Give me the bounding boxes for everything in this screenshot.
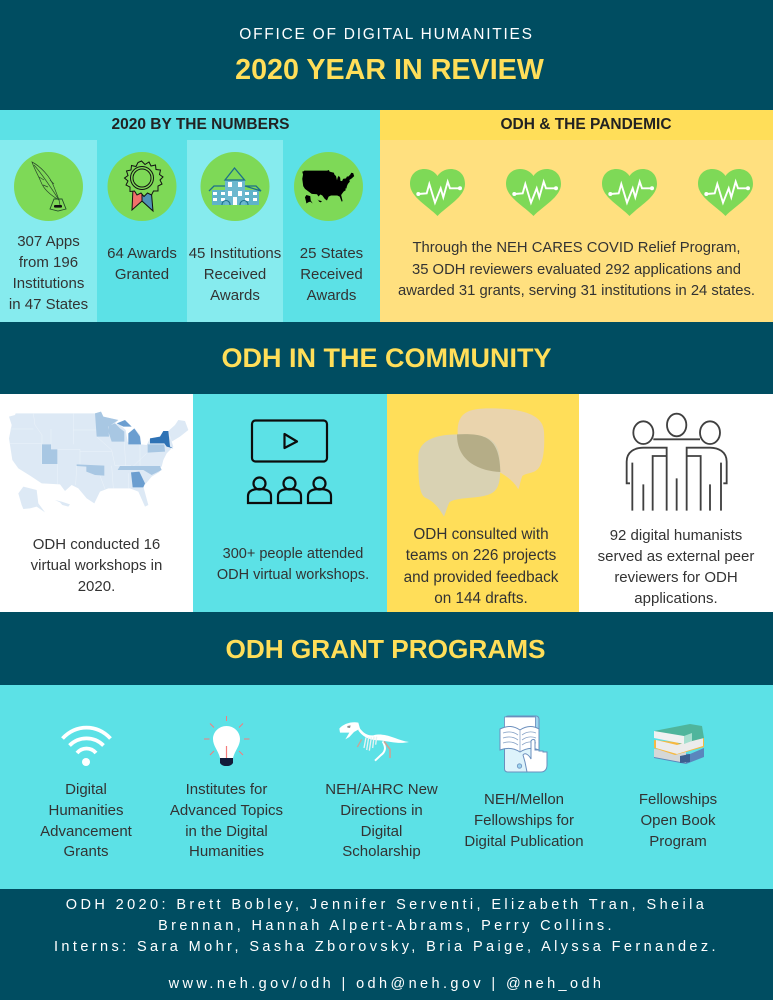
text: awards granted: Granted bbox=[115, 266, 169, 282]
text: workshops conducted: ODH conducted 16 bbox=[33, 536, 160, 553]
text: workshops conducted: virtual workshops in bbox=[31, 557, 162, 574]
text: digital humanities advancement grants: Digital bbox=[65, 781, 107, 798]
heading: ODH in the community: ODH IN THE COMMUNITY bbox=[222, 343, 552, 373]
text: peer reviewers: applications. bbox=[634, 590, 718, 606]
icon: heart 3 bbox=[602, 169, 657, 216]
heading: 2020 by the numbers: 2020 BY THE NUMBERS bbox=[111, 116, 290, 133]
text: open book program bbox=[639, 791, 717, 850]
subtitle: office name: OFFICE OF DIGITAL HUMANITIES bbox=[239, 26, 534, 43]
state: Utah bbox=[42, 444, 57, 464]
icon: black US map bbox=[294, 152, 363, 221]
text: attendance bbox=[217, 546, 369, 583]
text: attendance: 300+ people attended bbox=[223, 546, 363, 562]
text: consultations bbox=[404, 526, 558, 607]
state: Wisconsin bbox=[108, 423, 124, 442]
panel: consultations bbox=[387, 394, 579, 612]
text: institutes for advanced topics: Institutes for bbox=[186, 781, 267, 798]
heading bar: pandemic: ODH & THE PANDEMIC bbox=[500, 116, 672, 133]
icon: institution building bbox=[200, 152, 270, 221]
state: New York bbox=[150, 431, 173, 448]
text: contact links: www.neh.gov/odh | odh@neh.gov | @neh_odh bbox=[169, 976, 604, 992]
text: consultations: ODH consulted with bbox=[413, 526, 549, 543]
text: institutions bbox=[189, 244, 281, 304]
panel: peer reviewers bbox=[579, 394, 773, 612]
text: institutions: 45 Institutions bbox=[189, 244, 281, 262]
column background: applications bbox=[0, 140, 97, 322]
panel: 2020 by the numbers bbox=[0, 110, 380, 322]
text: consultations: teams on 226 projects bbox=[406, 547, 556, 564]
text: states bbox=[300, 244, 363, 304]
map: workshop states choropleth bbox=[9, 412, 188, 512]
text: consultations: and provided feedback bbox=[404, 569, 558, 586]
text: applications: in 47 States bbox=[9, 296, 88, 313]
text: pandemic summary bbox=[398, 240, 755, 299]
text: staff names: Brennan, Hannah Alpert-Abrams, Perry Collins. bbox=[158, 918, 615, 934]
state: Pennsylvania bbox=[148, 444, 165, 453]
panel: grant programs bbox=[0, 685, 773, 889]
text: institutions: Received bbox=[204, 266, 266, 282]
text: applications: Institutions bbox=[13, 275, 84, 292]
text: applications: from 196 bbox=[19, 254, 78, 271]
state: North Carolina bbox=[118, 466, 162, 475]
heading: ODH grant programs: ODH GRANT PROGRAMS bbox=[225, 634, 546, 664]
text: mellon fellowships: Digital Publication bbox=[464, 833, 584, 850]
footer band bbox=[0, 889, 773, 1000]
text: new directions in digital scholarship: Scholarship bbox=[342, 843, 421, 860]
text: pandemic summary: 35 ODH reviewers evaluated 292 applications and bbox=[412, 262, 741, 278]
icon: video and audience bbox=[246, 419, 332, 504]
text: digital humanities advancement grants: Humanities bbox=[48, 802, 124, 819]
text: digital humanities advancement grants: Advancement bbox=[40, 823, 132, 840]
text: awards granted bbox=[107, 244, 177, 282]
text: institutes for advanced topics: Advanced Topics bbox=[170, 802, 283, 819]
text: workshops conducted bbox=[30, 536, 162, 595]
panel: ODH and the pandemic bbox=[380, 110, 773, 322]
state: Oklahoma bbox=[77, 464, 104, 476]
icon: heart 4 bbox=[698, 169, 753, 216]
text: workshops conducted: 2020. bbox=[78, 578, 115, 595]
text: new directions in digital scholarship: Directions in bbox=[340, 802, 423, 819]
icon: overlapping speech bubbles bbox=[418, 408, 544, 516]
icon: heart 2 bbox=[506, 169, 561, 216]
text: new directions in digital scholarship: Digital bbox=[361, 823, 402, 840]
panel: workshop attendance bbox=[193, 394, 387, 612]
icon: tablet with open book bbox=[500, 716, 548, 772]
text: peer reviewers: reviewers for ODH bbox=[614, 568, 738, 586]
text: peer reviewers: 92 digital humanists bbox=[610, 526, 742, 544]
text: open book program: Fellowships bbox=[639, 791, 717, 808]
text: new directions in digital scholarship: NEH/AHRC New bbox=[325, 781, 438, 798]
icon: dinosaur skeleton bbox=[339, 722, 409, 762]
text: open book program: Open Book bbox=[640, 812, 716, 829]
title: 2020 YEAR IN REVIEW bbox=[235, 54, 544, 86]
state: Michigan bbox=[117, 420, 141, 444]
text: mellon fellowships bbox=[464, 791, 584, 850]
text: institutions: Awards bbox=[210, 286, 260, 304]
text: new directions in digital scholarship bbox=[325, 781, 438, 860]
text: digital humanities advancement grants: Grants bbox=[63, 843, 108, 860]
state: Minnesota bbox=[95, 412, 118, 437]
text: applications: 307 Apps bbox=[17, 233, 80, 250]
column background: institutions bbox=[187, 140, 283, 322]
text: applications bbox=[9, 233, 88, 313]
icon: light bulb bbox=[204, 716, 250, 766]
text: peer reviewers: served as external peer bbox=[598, 548, 754, 564]
text: institutes for advanced topics: in the Digital bbox=[185, 823, 268, 840]
icon: group of three people bbox=[626, 412, 728, 511]
text: staff names: ODH 2020: Brett Bobley, Jennifer Serventi, Elizabeth Tran, Sheila bbox=[66, 897, 707, 913]
text: staff names bbox=[54, 897, 719, 955]
text: peer reviewers bbox=[598, 526, 754, 606]
icon: stack of books bbox=[654, 724, 704, 764]
text: institutes for advanced topics: Humanities bbox=[189, 843, 264, 860]
text: open book program: Program bbox=[649, 833, 707, 850]
icon: heart 1 bbox=[410, 169, 465, 216]
text: pandemic summary: Through the NEH CARES COVID Relief Program, bbox=[412, 240, 741, 256]
text: institutes for advanced topics bbox=[170, 781, 283, 860]
icon: quill and inkwell bbox=[14, 152, 83, 221]
panel: workshops map bbox=[0, 394, 193, 612]
text: awards granted: 64 Awards bbox=[107, 244, 177, 262]
text: mellon fellowships: NEH/Mellon bbox=[484, 791, 564, 808]
header band bbox=[0, 0, 773, 110]
text: pandemic summary: awarded 31 grants, serving 31 institutions in 24 states. bbox=[398, 283, 755, 299]
icon: wifi bbox=[61, 726, 112, 766]
text: consultations: on 144 drafts. bbox=[434, 590, 528, 607]
text: digital humanities advancement grants bbox=[40, 781, 132, 860]
state: Georgia bbox=[131, 472, 145, 487]
text: mellon fellowships: Fellowships for bbox=[474, 812, 574, 829]
heading bar: pandemic bbox=[380, 110, 773, 140]
text: states: Received bbox=[300, 266, 363, 282]
text: attendance: ODH virtual workshops. bbox=[217, 567, 369, 583]
icon: award ribbon bbox=[108, 152, 176, 221]
text: states: Awards bbox=[307, 286, 356, 304]
text: states: 25 States bbox=[300, 244, 363, 262]
text: staff names: Interns: Sara Mohr, Sasha Zborovsky, Bria Paige, Alyssa Fernandez. bbox=[54, 939, 719, 955]
